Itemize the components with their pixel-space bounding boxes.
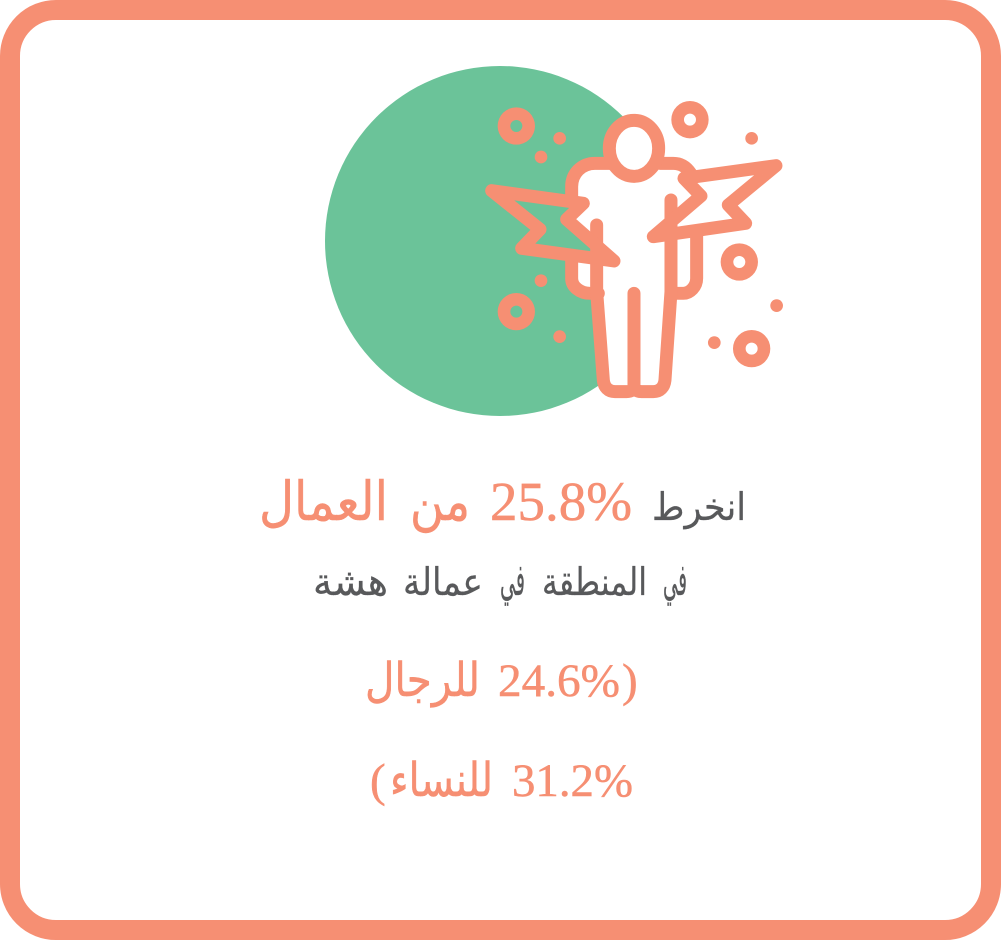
text: في <box>663 556 687 606</box>
right lightning bolt <box>653 166 776 237</box>
dots <box>535 132 783 349</box>
green circle <box>325 66 675 416</box>
text: women share: للنساء <box>390 755 493 807</box>
text: line 1: من <box>410 472 470 533</box>
text: line 2 <box>313 556 687 606</box>
text: line 2: في <box>500 556 525 606</box>
text: men share: ) <box>622 655 638 707</box>
text: women share: 31.2% <box>512 755 633 807</box>
icon: injured person with lightning bolts <box>492 101 783 392</box>
text: line 1 <box>259 471 746 533</box>
left lightning bolt <box>492 191 614 261</box>
text: line 2: عمالة <box>403 562 483 604</box>
text: women share: ( <box>370 755 386 807</box>
head <box>609 120 659 176</box>
body fill <box>567 163 697 392</box>
text: men share: 24.6% <box>498 655 620 707</box>
text: line 1: العمال <box>259 472 388 532</box>
arms and shoulders <box>572 163 697 293</box>
text: women share <box>370 755 633 807</box>
torso and legs <box>597 200 671 392</box>
text: men share: للرجال <box>365 655 480 708</box>
text: men share <box>365 655 638 708</box>
text: line 1: 25.8% <box>490 471 632 532</box>
text: line 1: انخرط <box>652 487 746 530</box>
rings <box>498 101 770 367</box>
text: line 2: هشة <box>313 562 388 604</box>
text: line 2: المنطقة <box>542 562 647 604</box>
